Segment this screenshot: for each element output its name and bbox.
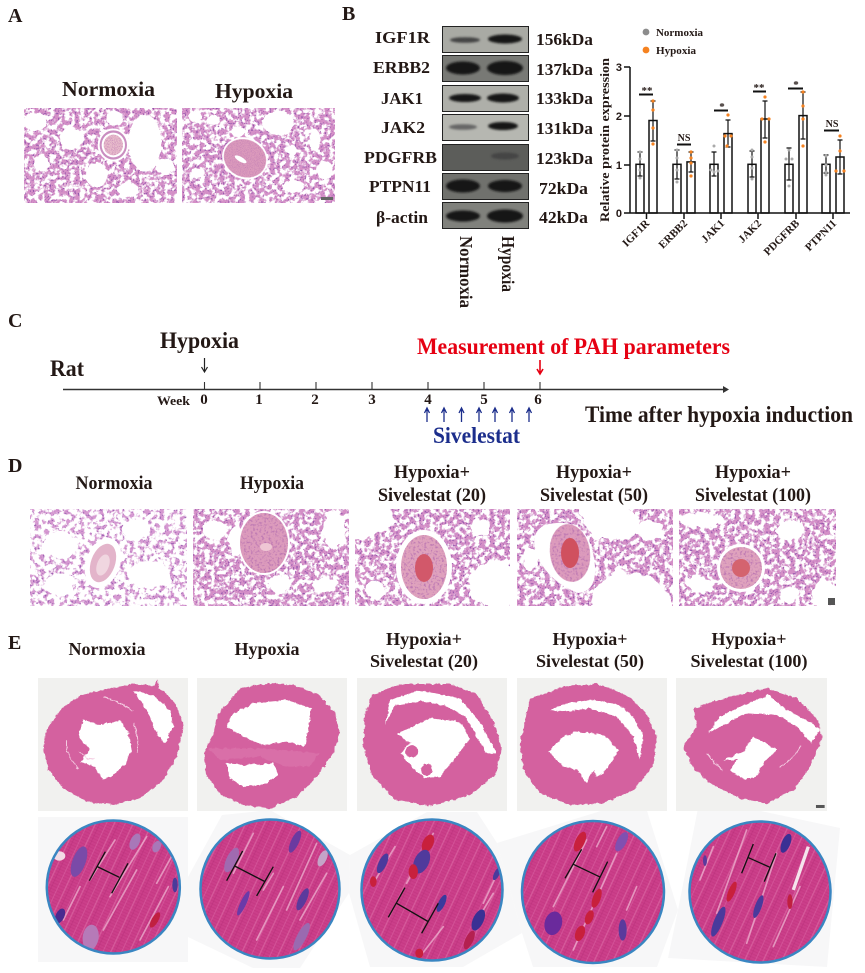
- x axis: [630, 213, 850, 219]
- arrow: measurement: [537, 360, 543, 374]
- label: Measurement of PAH parameters: Measurement of PAH parameters: [417, 334, 730, 359]
- column headings: Hypoxia+: [552, 629, 628, 649]
- significance markers: **: [642, 85, 653, 97]
- x axis category labels: PDGFRB: [762, 217, 803, 258]
- panel A: lung histology, normoxia vs hypoxia: [8, 5, 335, 203]
- panel B left: western blots: [342, 3, 594, 308]
- column headings: Hypoxia+: [556, 463, 632, 483]
- week labels: 4: [424, 392, 432, 408]
- x axis category labels: JAK1: [699, 218, 727, 246]
- blot labels: JAK2: [381, 118, 425, 137]
- column headings: Sivelestat (100): [690, 651, 808, 672]
- molecular weights: 42kDa: [539, 208, 589, 227]
- y axis title: Relative protein expression: [597, 57, 612, 222]
- panel letter E: E: [8, 632, 21, 654]
- column headings: Sivelestat (100): [695, 486, 811, 506]
- column headings: Hypoxia+: [712, 629, 786, 649]
- week labels: [157, 392, 542, 408]
- week labels: 1: [255, 392, 263, 408]
- x axis category labels: IGF1R: [620, 217, 653, 249]
- week labels: 3: [368, 392, 376, 408]
- blot strips: [442, 26, 528, 228]
- column headings: Hypoxia+: [394, 463, 470, 483]
- molecular weights: 123kDa: [536, 149, 594, 168]
- column headings: [76, 463, 811, 506]
- column headings: Hypoxia: [240, 474, 304, 494]
- label: Hypoxia: Hypoxia: [160, 328, 239, 353]
- column headings: [68, 629, 808, 672]
- x axis category labels: JAK2: [736, 217, 764, 246]
- x axis category labels: PTPN11: [803, 218, 839, 254]
- panel D: lung histology by treatment: [8, 455, 839, 610]
- legend: Hypoxia: [656, 46, 696, 57]
- week labels: Week: [157, 393, 191, 408]
- label: Sivelestat: Sivelestat: [433, 423, 520, 448]
- panel E: heart sections and magnified myocardium: [8, 629, 840, 968]
- heart section: hypoxia + sivelestat 50: [520, 683, 657, 805]
- column headings: Sivelestat (20): [370, 651, 478, 672]
- heart section: hypoxia + sivelestat 20: [363, 684, 502, 806]
- blot labels: PDGFRB: [364, 148, 437, 167]
- blot bands: [446, 34, 523, 222]
- column headings: Hypoxia+: [715, 463, 791, 483]
- image: normoxia: [30, 509, 187, 606]
- rotated lane label: Hypoxia: Hypoxia: [498, 236, 518, 292]
- rotated lane label: Normoxia: Normoxia: [456, 236, 476, 308]
- x axis category labels: [620, 217, 839, 258]
- image: hypoxia + sivelestat 100: [679, 509, 839, 609]
- image: normoxia lung section: [23, 108, 177, 203]
- week labels: 2: [311, 392, 319, 408]
- heading: Normoxia: Normoxia: [62, 77, 156, 101]
- significance markers: [639, 79, 839, 144]
- heading: Hypoxia: Hypoxia: [215, 79, 294, 103]
- label: Time after hypoxia induction: Time after hypoxia induction: [585, 402, 853, 427]
- magnified circle: hypoxia + sivelestat 20: [362, 820, 510, 960]
- molecular weights: [536, 30, 594, 227]
- molecular weights: 72kDa: [539, 179, 589, 198]
- panel B right: bar chart of relative protein expression: [597, 28, 850, 258]
- molecular weights: 131kDa: [536, 119, 594, 138]
- column headings: Normoxia: [76, 474, 152, 494]
- blot labels: ERBB2: [373, 58, 430, 77]
- data points: normoxia: [638, 144, 828, 188]
- light backing panels behind the circles: [38, 798, 840, 968]
- heart section: hypoxia: [204, 683, 340, 808]
- column headings: Sivelestat (50): [536, 651, 644, 672]
- blue arrows: sivelestat dosing: [424, 408, 532, 422]
- data points: hypoxia: [651, 90, 846, 178]
- panel letter D: D: [8, 455, 22, 477]
- blot labels: PTPN11: [369, 177, 431, 196]
- image: hypoxia + sivelestat 20: [355, 509, 510, 606]
- week labels: 0: [200, 392, 208, 408]
- magnified circle: normoxia: [47, 820, 180, 954]
- magnified circle: hypoxia + sivelestat 100: [690, 822, 830, 962]
- panel letter C: C: [8, 310, 22, 332]
- magnified circle: hypoxia + sivelestat 50: [522, 821, 664, 963]
- y axis: 0: [616, 208, 622, 220]
- timeline axis with week ticks: [63, 382, 729, 393]
- panel letter A: A: [8, 5, 23, 27]
- significance markers: NS: [678, 133, 691, 144]
- significance markers: NS: [826, 119, 839, 130]
- significance markers: **: [754, 82, 765, 94]
- arrow: hypoxia start: [202, 358, 208, 372]
- heart section: hypoxia + sivelestat 100: [683, 688, 825, 808]
- molecular weights: 133kDa: [536, 89, 594, 108]
- column headings: Sivelestat (50): [540, 486, 648, 506]
- legend: [643, 28, 703, 57]
- week labels: 5: [480, 392, 488, 408]
- bars: [636, 116, 844, 213]
- significance markers: *: [719, 101, 725, 113]
- heart section backgrounds: [38, 678, 827, 811]
- image: hypoxia lung section: [182, 108, 335, 203]
- error bars: [638, 92, 842, 180]
- blot labels: β-actin: [376, 208, 429, 227]
- label: Rat: Rat: [50, 356, 84, 381]
- legend: Normoxia: [656, 28, 703, 39]
- image: hypoxia: [193, 509, 349, 606]
- week labels: 6: [534, 392, 542, 408]
- heart section: normoxia: [43, 679, 183, 805]
- panel letter B: B: [342, 3, 355, 25]
- y axis: 3: [616, 62, 622, 74]
- blot labels: IGF1R: [375, 28, 431, 47]
- column headings: Hypoxia: [234, 639, 300, 659]
- magnified circle: hypoxia: [200, 820, 340, 958]
- molecular weights: 137kDa: [536, 60, 594, 79]
- molecular weights: 156kDa: [536, 30, 594, 49]
- column headings: Normoxia: [68, 639, 146, 659]
- y axis: 1: [616, 160, 622, 172]
- column headings: Hypoxia+: [386, 629, 462, 649]
- blot labels: JAK1: [381, 89, 423, 108]
- panel C: experimental timeline: [8, 310, 853, 448]
- y axis: [616, 62, 630, 220]
- blot labels: [364, 28, 437, 227]
- image: hypoxia + sivelestat 50: [517, 505, 673, 610]
- y axis: 2: [616, 111, 622, 123]
- significance markers: *: [793, 79, 799, 91]
- x axis category labels: ERBB2: [657, 217, 690, 251]
- column headings: Sivelestat (20): [378, 486, 486, 506]
